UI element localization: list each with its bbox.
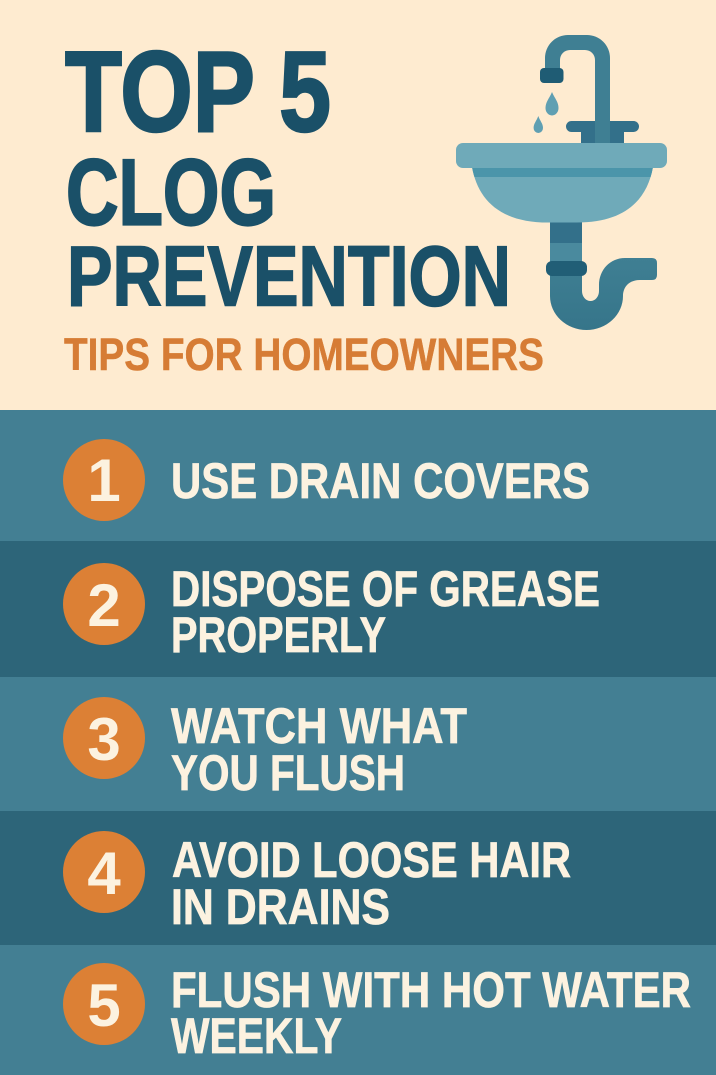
tip 5 text: WEEKLY — [171, 1008, 342, 1064]
number badge 1: 1 — [87, 447, 121, 514]
faucet — [540, 35, 639, 144]
tip 2 text: DISPOSE OF GREASE — [171, 561, 600, 617]
panel: tip 4 — [0, 811, 716, 945]
number badge 2 — [63, 563, 145, 645]
number badge 4 — [63, 831, 145, 913]
title: TOP 5 — [65, 29, 331, 156]
drain pipe and trap — [546, 222, 657, 330]
tip 3 text — [171, 698, 467, 801]
panel: tip 3 — [0, 677, 716, 811]
basin — [456, 143, 667, 222]
title: PREVENTION — [67, 230, 511, 324]
panel: tip 5 — [0, 945, 716, 1075]
number badge 3: 3 — [87, 706, 121, 773]
title — [65, 29, 511, 324]
tip 1 text: USE DRAIN COVERS — [171, 453, 590, 509]
icon: sink with dripping faucet and trap — [456, 35, 667, 330]
tip 2 text — [171, 561, 600, 663]
number badge 5 — [63, 963, 145, 1045]
tip 4 text: IN DRAINS — [171, 879, 390, 935]
panel: tip 2 — [0, 541, 716, 677]
water drops — [534, 92, 558, 133]
subtitle: TIPS FOR HOMEOWNERS — [64, 329, 544, 380]
tip 2 text: PROPERLY — [171, 607, 386, 663]
tip 3 text: YOU FLUSH — [171, 745, 405, 801]
number badge 5: 5 — [87, 972, 121, 1039]
number badge 3 — [63, 697, 145, 779]
number badge 4: 4 — [87, 840, 121, 907]
tip 4 text — [171, 832, 571, 935]
number badge 1 — [63, 439, 145, 521]
tip 4 text: AVOID LOOSE HAIR — [172, 832, 571, 888]
title: CLOG — [66, 140, 276, 244]
tip 5 text — [171, 962, 691, 1064]
number badge 2: 2 — [87, 572, 121, 639]
tip 3 text: WATCH WHAT — [171, 698, 467, 754]
panel: tip 1 — [0, 410, 716, 541]
